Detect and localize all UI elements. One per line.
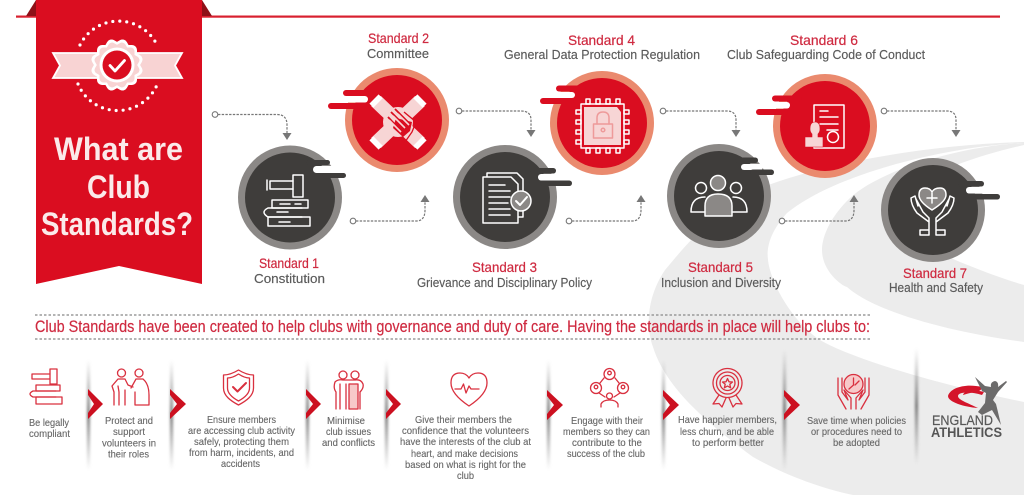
badge icon	[53, 21, 182, 111]
standard 4 circle	[540, 71, 654, 175]
icon: secured chip	[576, 99, 629, 153]
standard 6 circle	[756, 74, 877, 178]
icon: award rosette	[713, 368, 742, 407]
icon: stamped document	[805, 105, 844, 148]
connector arrows	[212, 108, 960, 224]
benefit 4: minimise issues: Minimise	[327, 415, 365, 427]
benefit 1: legally compliant: Be legally	[29, 417, 70, 429]
standard 6 label: Standard 6	[790, 32, 858, 48]
benefit 5: member confidence	[400, 373, 531, 482]
standard 3 label: Standard 3	[472, 259, 537, 275]
icon: heart in hands	[911, 188, 954, 235]
icon: clock in hands	[838, 374, 869, 409]
benefit 7: happier members	[678, 368, 777, 449]
benefit 6: engage members: contribute to the	[572, 437, 642, 449]
benefit 6: engage members	[563, 368, 650, 460]
icon: three people	[691, 176, 747, 216]
standard 1 circle	[238, 146, 349, 250]
benefit 2: protect volunteers: Protect and	[105, 415, 153, 427]
benefit 5: member confidence: based on what is right for the	[405, 459, 526, 471]
England Athletics logo	[931, 377, 1007, 440]
benefit 7: happier members: less churn, and be able	[680, 426, 774, 438]
standard 3 label: Grievance and Disciplinary Policy	[417, 276, 593, 290]
standard 1 label: Constitution	[254, 272, 325, 286]
standard 7 label: Health and Safety	[889, 281, 984, 295]
benefit 8: save time: be adopted	[833, 437, 880, 449]
standard 2 circle	[328, 68, 449, 172]
standard 1 label: Standard 1	[259, 255, 319, 271]
standard 4 label: Standard 4	[568, 32, 635, 48]
standard 6 label	[727, 32, 926, 62]
benefit 2: protect volunteers: support	[113, 426, 145, 438]
benefit 5: member confidence: Give their members the	[415, 414, 512, 426]
benefit 5: member confidence: heart, and make decisions	[411, 448, 518, 460]
benefit 4: minimise issues: and conflicts	[322, 437, 375, 449]
benefit 3: safe activity: safely, protecting them	[194, 436, 289, 448]
standard 5 circle	[667, 144, 774, 248]
standard 7 label	[889, 265, 984, 295]
benefit dividers and chevrons	[87, 348, 918, 470]
icon: joined hands	[374, 99, 422, 145]
standard 3 label	[417, 259, 593, 290]
standard 5 label: Inclusion and Diversity	[661, 276, 782, 290]
standard 5 label: Standard 5	[688, 259, 753, 275]
benefit 3: safe activity: Ensure members	[207, 414, 276, 426]
benefit 2: protect volunteers: their roles	[108, 448, 149, 460]
benefit 5: member confidence: have the interests of the club at	[400, 436, 531, 448]
ribbon title: What are	[54, 131, 183, 167]
standard 4 label	[504, 32, 700, 62]
standard 3 circle	[453, 145, 572, 249]
benefit 5: member confidence: club	[457, 470, 474, 482]
benefit 4: minimise issues	[322, 371, 375, 449]
benefit 4: minimise issues: club issues	[326, 426, 371, 438]
background swoosh	[649, 142, 1024, 495]
icon: gavel and books	[264, 175, 310, 226]
benefit 8: save time	[807, 374, 906, 449]
standard 5 label	[661, 259, 782, 290]
benefit 1: legally compliant: compliant	[29, 428, 70, 440]
icon: heart with pulse	[451, 373, 487, 406]
ribbon banner	[26, 0, 212, 284]
standard 7 label: Standard 7	[903, 265, 967, 281]
icon: handshake	[112, 369, 149, 405]
icon: gavel and books	[30, 369, 62, 404]
benefit 5: member confidence: confidence that the volunteers	[402, 425, 529, 437]
benefit 3: safe activity: from harm, incidents, and	[189, 447, 294, 459]
icon: shield	[224, 370, 254, 405]
ribbon title: Standards?	[41, 206, 193, 242]
icon: policy document	[483, 173, 531, 223]
benefit 3: safe activity: are accessing club activity	[188, 425, 296, 437]
standard 7 circle	[881, 158, 1000, 262]
benefit 7: happier members: to perform better	[692, 437, 764, 449]
England Athletics logo: ATHLETICS	[931, 424, 1002, 440]
benefit 8: save time: Save time when policies	[807, 415, 906, 427]
benefit 6: engage members: members so they can	[563, 426, 650, 438]
standard 4 label: General Data Protection Regulation	[504, 48, 700, 62]
benefit 8: save time: or procedures need to	[811, 426, 902, 438]
headline banner: Club Standards have been created to help clubs with governance and duty of care. Having the standards in place will help clubs to:	[35, 317, 870, 336]
benefit 3: safe activity: accidents	[221, 458, 260, 470]
logo runner	[975, 377, 1007, 425]
icon: couple embracing	[334, 371, 363, 409]
ribbon title	[41, 131, 193, 242]
logo swoosh	[948, 386, 984, 408]
standard 6 label: Club Safeguarding Code of Conduct	[727, 48, 926, 62]
icon: people network	[590, 368, 628, 407]
England Athletics logo: ENGLAND	[932, 412, 993, 428]
top red rule	[16, 16, 1000, 18]
benefit 6: engage members: success of the club	[567, 448, 645, 460]
standard 2 label: Committee	[367, 47, 429, 61]
benefit 7: happier members: Have happier members,	[678, 414, 777, 426]
standard 1 label	[254, 255, 325, 286]
benefit 2: protect volunteers	[102, 369, 156, 460]
benefit 3: safe activity	[188, 370, 296, 470]
benefit 2: protect volunteers: volunteers in	[102, 438, 156, 450]
benefit 6: engage members: Engage with their	[571, 415, 643, 427]
ribbon title: Club	[87, 169, 150, 205]
benefit 1: legally compliant	[29, 369, 70, 440]
standard 2 label: Standard 2	[368, 30, 429, 46]
standard 2 label	[367, 30, 429, 61]
